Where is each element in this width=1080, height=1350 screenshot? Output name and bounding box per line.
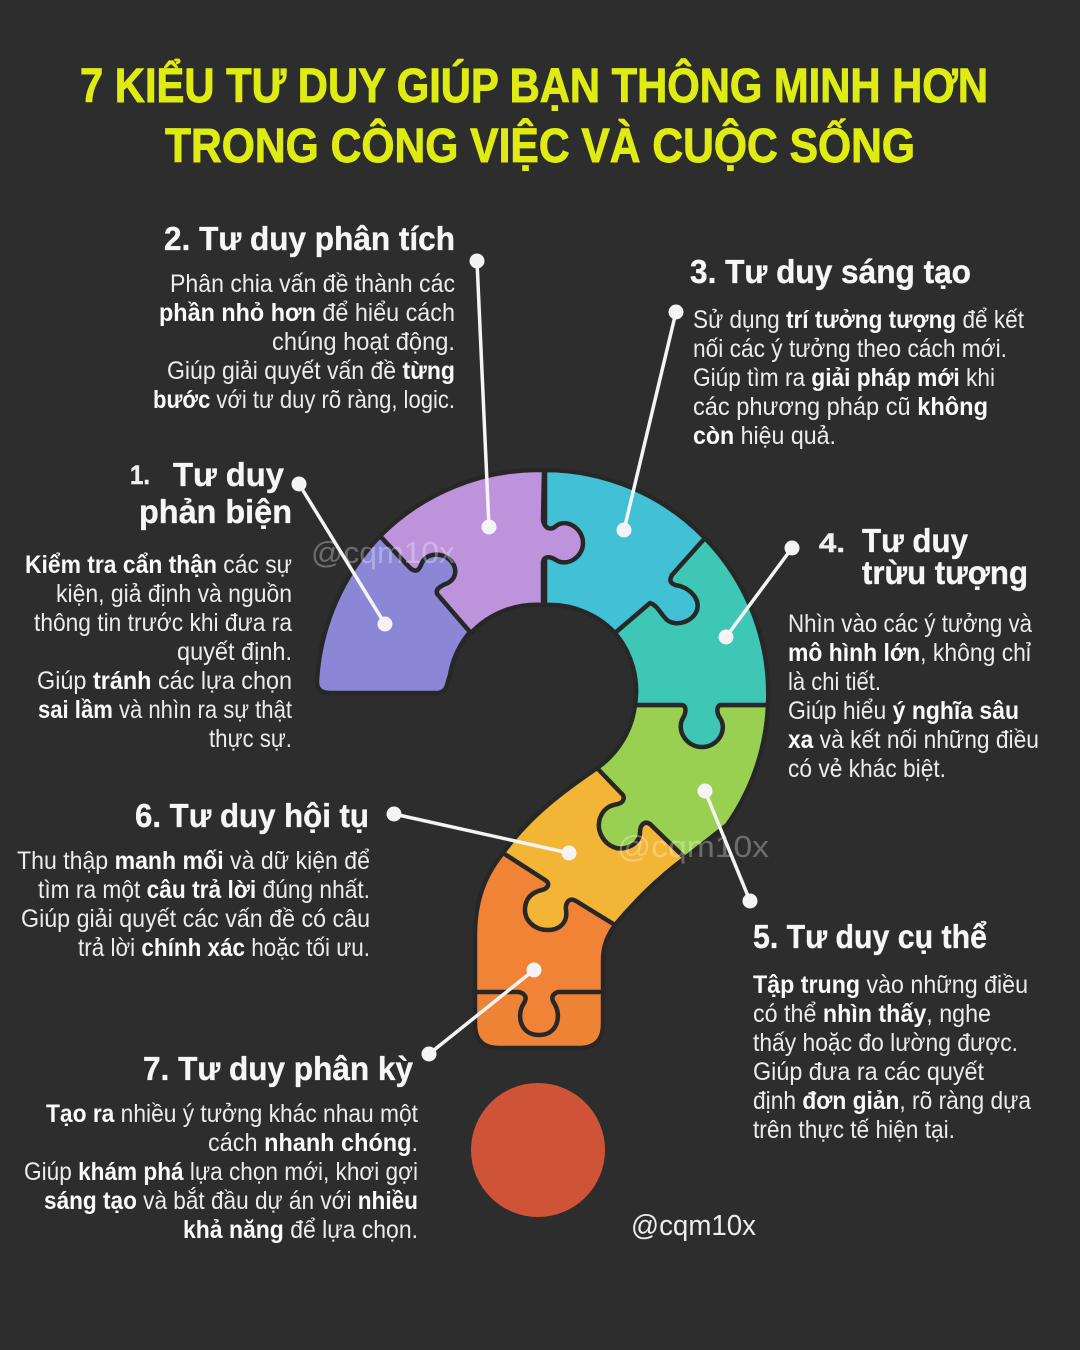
text block 3: còn hiệu quả.	[693, 422, 836, 450]
heading 4: 4.	[819, 528, 845, 558]
text block 2: bước với tư duy rõ ràng, logic.	[153, 386, 455, 414]
text block 1: thực sự.	[209, 725, 292, 753]
text block 1: quyết định.	[177, 638, 292, 666]
text block 1: Kiểm tra cẩn thận các sự	[25, 551, 292, 579]
text block 4	[788, 610, 1039, 783]
piece 5: green	[597, 705, 768, 858]
heading 7: 7. Tư duy phân kỳ	[143, 1050, 414, 1087]
text block 4: có vẻ khác biệt.	[788, 755, 946, 783]
text block 7: Tạo ra nhiều ý tưởng khác nhau một	[46, 1100, 418, 1128]
watermark: upper: @cqm10x	[311, 535, 456, 570]
text block 4: là chi tiết.	[788, 668, 881, 696]
panel: tư duy cụ thể	[753, 918, 1031, 1144]
piece 7: orange	[475, 853, 615, 1035]
panel: tư duy phân kỳ	[24, 1050, 418, 1244]
connector 6	[386, 806, 576, 860]
text block 3: nối các ý tưởng theo cách mới.	[693, 335, 1007, 363]
text block 1: sai lầm và nhìn ra sự thật	[38, 696, 292, 724]
heading 6: 6. Tư duy hội tụ	[135, 797, 369, 834]
text block 2: chúng hoạt động.	[272, 328, 455, 356]
title	[80, 58, 988, 173]
text block 2: Giúp giải quyết vấn đề từng	[167, 357, 455, 385]
text block 4: Nhìn vào các ý tưởng và	[788, 610, 1032, 638]
panel: tư duy hội tụ	[17, 797, 370, 962]
text block 6	[17, 847, 370, 962]
connector 1	[292, 476, 392, 632]
text block 3	[693, 306, 1024, 450]
heading 1: phản biện	[139, 493, 292, 530]
heading 1	[130, 456, 292, 530]
connector 3	[616, 304, 684, 538]
piece 4: teal	[615, 538, 768, 747]
text block 5: Tập trung vào những điều	[753, 971, 1028, 999]
text block 5: định đơn giản, rõ ràng dựa	[753, 1087, 1031, 1115]
text block 5	[753, 971, 1031, 1144]
text block 4: xa và kết nối những điều	[788, 726, 1039, 754]
question mark puzzle	[317, 470, 768, 1048]
text block 7	[24, 1100, 418, 1244]
connector 2	[470, 254, 496, 534]
text block 6: Thu thập manh mối và dữ kiện để	[17, 847, 370, 875]
text block 5: Giúp đưa ra các quyết	[753, 1058, 984, 1086]
text block 6: trả lời chính xác hoặc tối ưu.	[78, 934, 370, 962]
heading 4: trừu tượng	[862, 554, 1028, 591]
heading 3: 3. Tư duy sáng tạo	[690, 253, 971, 290]
text block 7: khả năng để lựa chọn.	[183, 1216, 418, 1244]
panel: tư duy trừu tượng	[788, 522, 1039, 783]
text block 2	[153, 270, 455, 414]
text block 5: có thể nhìn thấy, nghe	[753, 1000, 991, 1028]
text block 1: kiện, giả định và nguồn	[56, 580, 292, 608]
icon: red dot of question mark	[471, 1083, 605, 1217]
text block 1: thông tin trước khi đưa ra	[34, 609, 292, 637]
panel: tư duy sáng tạo	[690, 253, 1024, 450]
text block 7: sáng tạo và bắt đầu dự án với nhiều	[44, 1186, 418, 1215]
piece 6: yellow	[503, 768, 685, 930]
heading 4: Tư duy	[862, 522, 969, 559]
text block 2: Phân chia vấn đề thành các	[170, 270, 455, 298]
text block 6: tìm ra một câu trả lời đúng nhất.	[38, 876, 370, 904]
panel: tư duy phản biện	[25, 456, 292, 753]
text block 5: trên thực tế hiện tại.	[753, 1116, 955, 1144]
heading 4	[819, 522, 1028, 591]
text block 7: Giúp khám phá lựa chọn mới, khơi gợi	[24, 1158, 418, 1186]
panel: tư duy phân tích	[153, 220, 455, 414]
text block 2: phần nhỏ hơn để hiểu cách	[159, 299, 455, 327]
watermark: lower: @cqm10x	[617, 829, 770, 864]
heading 1: Tư duy	[173, 456, 285, 493]
text block 1: Giúp tránh các lựa chọn	[37, 667, 292, 695]
text block 1	[25, 551, 292, 753]
text block 4: Giúp hiểu ý nghĩa sâu	[788, 697, 1019, 725]
text block 3: Giúp tìm ra giải pháp mới khi	[693, 364, 995, 392]
text block 6: Giúp giải quyết các vấn đề có câu	[21, 905, 370, 933]
piece 3: blue	[545, 470, 705, 633]
text block 5: thấy hoặc đo lường được.	[753, 1029, 1018, 1057]
text block 4: mô hình lớn, không chỉ	[788, 639, 1031, 667]
piece: bottom of stem	[475, 990, 603, 1048]
connector 5	[698, 784, 758, 908]
text block 3: các phương pháp cũ không	[693, 393, 988, 421]
author handle: @cqm10x	[631, 1210, 756, 1242]
text block 3: Sử dụng trí tưởng tượng để kết	[693, 306, 1024, 334]
heading 1: 1.	[130, 460, 150, 490]
connector 7	[422, 962, 542, 1062]
heading 2: 2. Tư duy phân tích	[164, 220, 455, 257]
piece 2: purple	[380, 470, 583, 633]
heading 5: 5. Tư duy cụ thể	[753, 918, 987, 955]
connector 4	[718, 540, 800, 644]
piece 1: violet	[317, 536, 470, 693]
text block 7: cách nhanh chóng.	[208, 1129, 418, 1157]
title: TRONG CÔNG VIỆC VÀ CUỘC SỐNG	[165, 118, 915, 173]
